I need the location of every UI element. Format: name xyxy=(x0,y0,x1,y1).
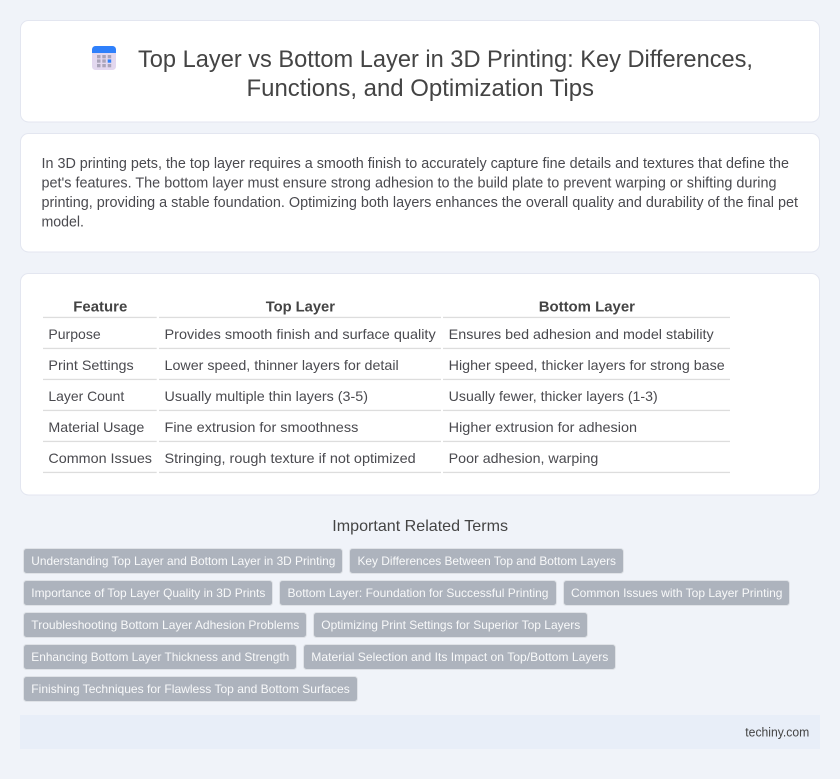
tag: troubleshooting xyxy=(24,612,306,638)
table row: common issues: Stringing, rough texture if not optimized xyxy=(164,450,416,466)
panel: introduction xyxy=(20,134,820,252)
tag: material selection xyxy=(304,644,616,670)
intro paragraph xyxy=(42,156,798,230)
table row: layer count: Usually multiple thin layers (3-5) xyxy=(164,388,368,404)
table row: print settings: Lower speed, thinner layers for detail xyxy=(164,357,399,373)
title: Functions, and Optimization Tips xyxy=(246,75,594,102)
tag: importance xyxy=(24,580,272,606)
tag: finishing: Finishing Techniques for Flawless Top and Bottom Surfaces xyxy=(31,682,350,696)
table row: purpose: Ensures bed adhesion and model stability xyxy=(449,326,714,342)
footer bar xyxy=(20,715,820,749)
tag: troubleshooting: Troubleshooting Bottom Layer Adhesion Problems xyxy=(31,618,299,632)
tag: optimizing xyxy=(314,612,588,638)
table row: layer count xyxy=(43,388,730,411)
tag: material selection: Material Selection and Its Impact on Top/Bottom Layers xyxy=(311,650,608,664)
panel: comparison table xyxy=(20,274,820,495)
related terms heading: Important Related Terms xyxy=(332,518,508,535)
table row: common issues: Common Issues xyxy=(48,450,152,466)
tag: key differences: Key Differences Between Top and Bottom Layers xyxy=(358,554,616,568)
tag: understanding: Understanding Top Layer and Bottom Layer in 3D Printing xyxy=(31,554,335,568)
tag: common issues: Common Issues with Top Layer Printing xyxy=(571,586,782,600)
table row: common issues: Poor adhesion, warping xyxy=(449,450,598,466)
title xyxy=(138,46,753,102)
intro paragraph: In 3D printing pets, the top layer requires a smooth finish to accurately capture fine details and textures that define the xyxy=(42,156,789,172)
table header row xyxy=(43,298,730,318)
tag: common issues xyxy=(564,580,790,606)
table row: print settings: Higher speed, thicker layers for strong base xyxy=(449,357,725,373)
table row: common issues xyxy=(43,450,730,473)
tag: enhancing: Enhancing Bottom Layer Thickness and Strength xyxy=(31,650,289,664)
table header row: Feature xyxy=(73,298,127,316)
tag: optimizing: Optimizing Print Settings for Superior Top Layers xyxy=(321,618,580,632)
table row: layer count: Usually fewer, thicker layers (1-3) xyxy=(449,388,658,404)
table row: purpose: Provides smooth finish and surface quality xyxy=(164,326,436,342)
tag: importance: Importance of Top Layer Quality in 3D Prints xyxy=(31,586,265,600)
table row: purpose: Purpose xyxy=(48,326,101,342)
intro paragraph: pet's features. The bottom layer must ensure strong adhesion to the build plate to prevent warping or shifting during xyxy=(42,176,776,192)
related terms tags xyxy=(24,548,790,702)
table row: purpose xyxy=(43,326,730,349)
tag: foundation: Bottom Layer: Foundation for Successful Printing xyxy=(288,586,548,600)
table header row: Top Layer xyxy=(266,298,335,316)
tag: understanding xyxy=(24,548,342,574)
table row: print settings: Print Settings xyxy=(48,357,134,373)
tag: enhancing xyxy=(24,644,296,670)
tag: key differences xyxy=(350,548,624,574)
table header row: Bottom Layer xyxy=(539,298,635,316)
table row: print settings xyxy=(43,357,730,380)
title: Top Layer vs Bottom Layer in 3D Printing: Key Differences, xyxy=(138,46,753,73)
table row: material usage: Material Usage xyxy=(48,419,145,435)
table row: layer count: Layer Count xyxy=(48,388,124,404)
intro paragraph: printing, providing a stable foundation. Optimizing both layers enhances the overall quality and durability of the final pet xyxy=(42,195,798,211)
panel: header card xyxy=(20,20,820,122)
tag: foundation xyxy=(280,580,556,606)
footer site name: techiny.com xyxy=(745,724,809,740)
intro paragraph: model. xyxy=(42,214,84,230)
table row: material usage xyxy=(43,419,730,442)
table row: material usage: Fine extrusion for smoothness xyxy=(164,419,358,435)
icon: calendar xyxy=(92,46,116,70)
tag: finishing xyxy=(24,676,358,702)
table row: material usage: Higher extrusion for adhesion xyxy=(449,419,637,435)
